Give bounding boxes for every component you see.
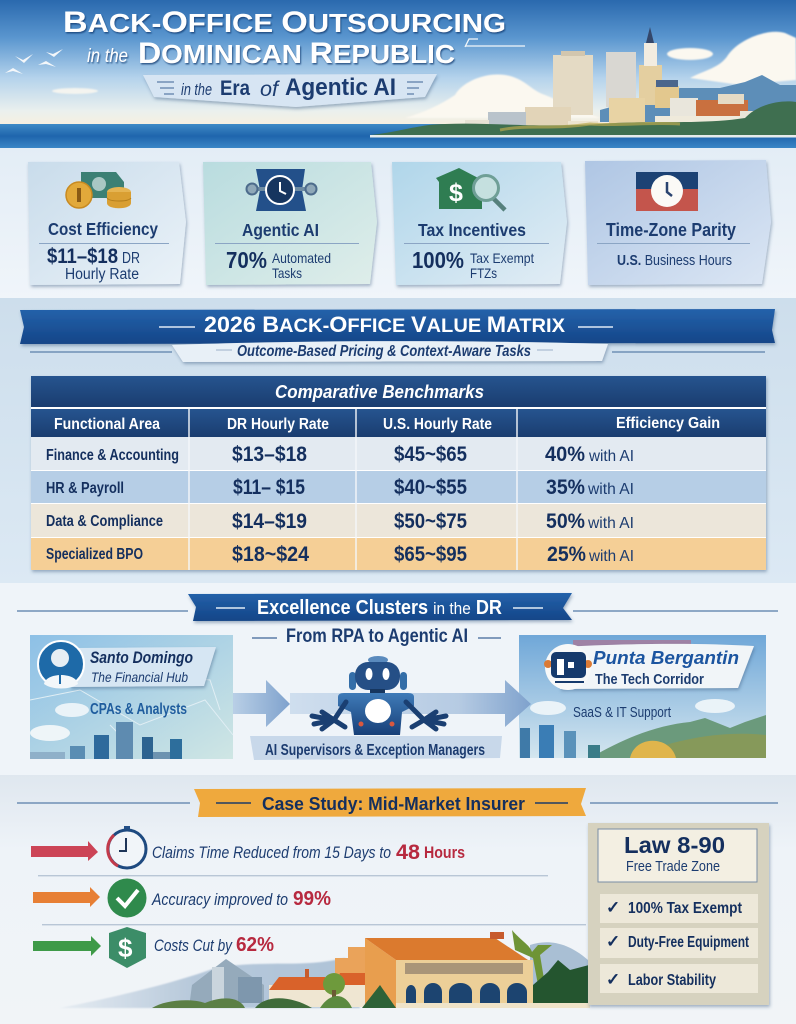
skyline <box>370 27 796 138</box>
card value: U.S. Business Hours <box>617 253 732 269</box>
panel: cost efficiency card <box>28 162 186 285</box>
table title bar: Comparative Benchmarks <box>275 381 484 402</box>
grey tower <box>190 959 264 1003</box>
callout: Punta Bergantin label: The Tech Corridor <box>595 672 704 688</box>
icon: dollar shield <box>109 927 146 968</box>
table row: specialized <box>31 538 766 570</box>
heading: value matrix banner <box>20 309 775 344</box>
table row: HR <box>31 471 766 503</box>
icon: dollar shield: $ <box>118 933 133 963</box>
benefit: labor stability: ✓ <box>606 970 620 989</box>
arrow: orange <box>33 887 100 907</box>
side orange blocks <box>335 947 365 975</box>
arrow: red <box>31 841 98 861</box>
heading: excellence clusters banner: Excellence Clusters in the DR <box>257 597 502 619</box>
table row: data: Data & Compliance <box>46 513 163 530</box>
label: AI supervisors ribbon: AI Supervisors & Exception Managers <box>265 742 485 759</box>
table header row: U.S. Hourly Rate <box>383 416 492 433</box>
result row: accuracy: 99% <box>293 888 331 910</box>
header scene <box>0 0 796 148</box>
subheading ribbon <box>30 341 765 362</box>
card title: Time-Zone Parity <box>606 220 736 240</box>
panel: agentic AI card: Tasks <box>272 265 302 281</box>
icon: gear clock <box>246 169 316 211</box>
benefit: labor stability <box>600 964 758 993</box>
table row: finance: with AI <box>588 448 634 465</box>
table row: HR: $40~$55 <box>394 476 467 499</box>
table row: finance: $13–$18 <box>232 443 307 466</box>
card value: $11–$18 <box>47 245 118 268</box>
result row: costs <box>33 927 274 968</box>
table row: HR: HR & Payroll <box>46 480 124 497</box>
title line 2: in the <box>87 46 128 67</box>
subheading: from RPA to agentic AI: From RPA to Agentic AI <box>286 625 468 647</box>
heading: value matrix banner: 2026 BACK-OFFICE VALUE MATRIX <box>204 312 565 337</box>
table header row: Efficiency Gain <box>616 415 720 432</box>
subtitle ribbon <box>143 74 437 107</box>
panel: tax incentives card <box>392 162 567 285</box>
benefit: tax exempt: 100% Tax Exempt <box>628 900 742 917</box>
card title: Cost Efficiency <box>48 219 158 239</box>
trees and palms <box>152 930 589 1008</box>
heading: case study banner <box>17 788 778 817</box>
panel: cost efficiency card: Hourly Rate <box>65 266 139 283</box>
result row: accuracy <box>33 878 331 918</box>
panel: agentic AI card: Automated <box>272 250 331 266</box>
table row: HR: 35% <box>546 476 585 499</box>
panel: cost efficiency card: DR <box>122 250 140 267</box>
panel: tax incentives card: FTZs <box>470 265 497 281</box>
table row: specialized: $18~$24 <box>232 543 309 566</box>
heading: excellence clusters banner <box>17 593 778 621</box>
icon: calendar clock <box>636 172 698 211</box>
panel: time-zone parity card <box>585 160 771 285</box>
table row: data: 50% <box>546 510 585 533</box>
law title box: Law 8-90 <box>624 832 725 858</box>
result row: costs: 62% <box>236 934 274 956</box>
arrow: center to right cluster <box>290 680 531 727</box>
result row: claims time: Hours <box>424 843 465 862</box>
result row: claims time <box>31 826 465 868</box>
icon: analyst avatar <box>38 641 84 688</box>
benefit: duty-free equipment <box>600 928 758 958</box>
decorative mark <box>465 39 525 47</box>
callout: Santo Domingo label: The Financial Hub <box>91 669 188 685</box>
benefit: tax exempt <box>600 894 758 923</box>
icon: dollar house with magnifier <box>436 168 505 210</box>
title line 2: DOMINICAN REPUBLIC <box>138 37 455 70</box>
panel: Law 8-90 free trade zone <box>588 823 769 1005</box>
result row: costs: Costs Cut by <box>154 936 233 955</box>
result row: claims time: Claims Time Reduced from 15 Days to <box>152 843 391 862</box>
subtitle ribbon: in the <box>181 80 212 99</box>
benefit: labor stability: Labor Stability <box>628 972 716 989</box>
icon: stopwatch <box>108 826 146 868</box>
arrow: green <box>33 936 101 956</box>
table row: finance: Finance & Accounting <box>46 447 179 464</box>
table row: data: $50~$75 <box>394 510 467 533</box>
table row: data: with AI <box>587 515 634 532</box>
heading: case study banner: Case Study: Mid-Market Insurer <box>262 793 525 814</box>
table row: HR: with AI <box>587 481 634 498</box>
table row: data: $14–$19 <box>232 510 307 533</box>
table row: finance: 40% <box>545 443 585 466</box>
icon: coins and banknote <box>66 172 131 208</box>
illustration: coastal buildings <box>60 930 590 1008</box>
callout: Santo Domingo label <box>70 647 216 687</box>
label: AI supervisors ribbon <box>250 736 502 760</box>
subtitle ribbon: Agentic AI <box>285 74 396 101</box>
table row: data <box>31 504 766 537</box>
title line 1: BACK- OFFICE OUTSOURCING <box>63 6 506 39</box>
table header row <box>31 409 766 437</box>
table header row: Functional Area <box>54 416 160 433</box>
subtitle ribbon: Era <box>220 77 250 100</box>
table row: specialized: 25% <box>547 543 586 566</box>
arrow: left cluster to center <box>233 680 290 727</box>
law title box <box>598 829 757 882</box>
table header row: DR Hourly Rate <box>227 416 329 433</box>
hills and skyline <box>520 699 766 758</box>
clouds <box>52 32 796 118</box>
icon: check badge <box>108 878 146 918</box>
panel: Santo Domingo <box>30 635 233 759</box>
cluster role: SaaS & IT Support <box>573 704 672 721</box>
robot left arm and hand <box>312 702 346 729</box>
map and skyline <box>30 675 233 759</box>
table row: specialized: $65~$95 <box>394 543 467 566</box>
result row: claims time: 48 <box>396 841 420 864</box>
small house <box>269 985 376 1007</box>
benefit: duty-free equipment: Duty-Free Equipment <box>628 934 749 951</box>
main building <box>365 938 396 1008</box>
card value: 100% <box>412 247 464 273</box>
table: comparative benchmarks <box>31 376 766 570</box>
table row: HR: $11– $15 <box>233 476 305 499</box>
panel: tax incentives card: Tax Exempt <box>470 250 534 266</box>
result row: accuracy: Accuracy improved to <box>151 890 288 909</box>
table row: specialized: Specialized BPO <box>46 546 143 563</box>
callout: Punta Bergantin label <box>560 644 754 689</box>
robot right arm and hand <box>406 702 446 729</box>
cluster role: CPAs & Analysts <box>90 701 187 718</box>
callout: Santo Domingo label: Santo Domingo <box>90 649 193 667</box>
law title box: Free Trade Zone <box>626 858 720 875</box>
table row: specialized: with AI <box>588 548 634 565</box>
callout: Punta Bergantin label: Punta Bergantin <box>593 648 739 668</box>
card title: Tax Incentives <box>418 220 526 240</box>
subtitle ribbon: of <box>260 78 280 101</box>
icon: dollar house with magnifier: $ <box>449 179 463 207</box>
icon: robot <box>312 656 446 735</box>
panel: Punta Bergantin <box>519 635 766 758</box>
table row: finance: $45~$65 <box>394 443 467 466</box>
benefit: duty-free equipment: ✓ <box>606 932 620 951</box>
card title: Agentic AI <box>242 220 319 240</box>
table row: finance <box>31 437 766 470</box>
table title bar <box>31 376 766 407</box>
icon: tech badge <box>544 644 592 690</box>
icon: seagulls <box>5 49 63 74</box>
benefit: tax exempt: ✓ <box>606 898 620 917</box>
subheading ribbon: Outcome-Based Pricing & Context-Aware Tasks <box>237 343 531 360</box>
card value: 70% <box>226 247 267 273</box>
panel: agentic AI card <box>203 162 377 285</box>
